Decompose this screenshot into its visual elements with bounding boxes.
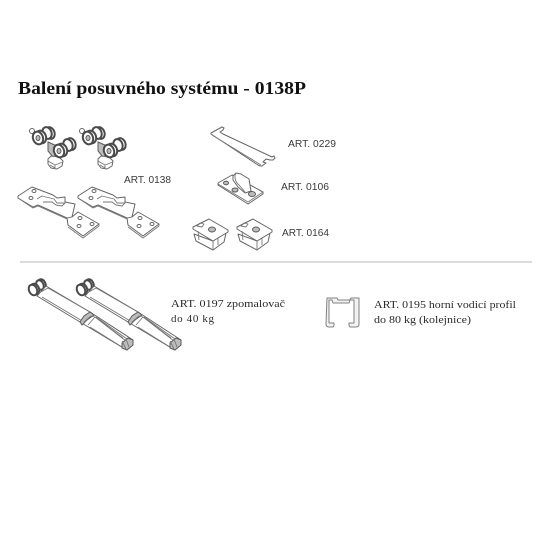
icon: soft-close dampers ART. 0197 (27, 278, 181, 350)
text: ART. 0197 description: do 40 kg (171, 313, 214, 325)
icon: guide blocks ART. 0164 (193, 219, 272, 250)
title: Balení posuvného systému - 0138P (18, 78, 306, 98)
divider (20, 261, 532, 263)
text: ART. 0195 description: do 80 kg (kolejnice) (374, 314, 471, 326)
label: ART. 0229: ART. 0229 (288, 139, 336, 150)
icon: roller carriages (30, 126, 127, 169)
icon: floor guide ART. 0106 (218, 173, 263, 204)
icon: mounting plates (18, 187, 159, 238)
icon: flat wrench ART. 0229 (211, 127, 275, 166)
label: ART. 0164: ART. 0164 (282, 228, 329, 239)
icon: top rail profile ART. 0195 (326, 298, 359, 327)
text: ART. 0197 description: ART. 0197 zpomalovač (171, 298, 285, 310)
label: ART. 0138: ART. 0138 (124, 175, 171, 186)
text: ART. 0195 description: ART. 0195 horní vodicí profil (374, 299, 516, 311)
label: ART. 0106: ART. 0106 (281, 182, 329, 193)
